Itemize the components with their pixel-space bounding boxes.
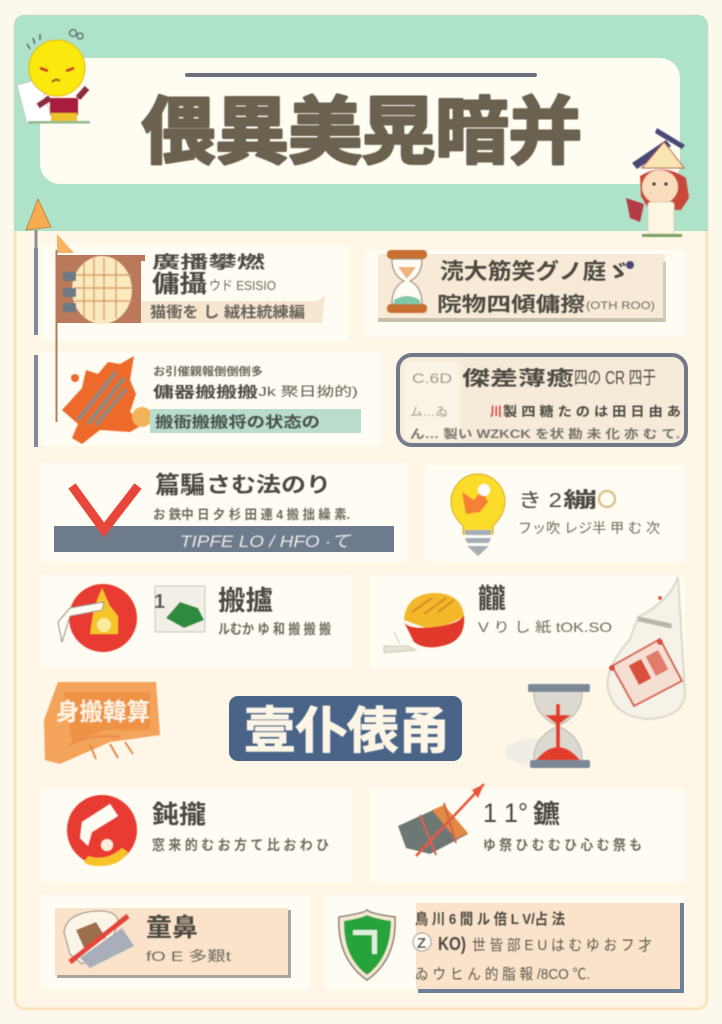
- icon: green shield: [339, 910, 395, 980]
- card text: 鳥 川 6 間 ル 倍 L V/占 法: [415, 910, 565, 928]
- card text: 1 1°: [483, 798, 528, 828]
- icon: green stamp: [154, 586, 205, 632]
- panel: check note: [40, 463, 408, 562]
- card text: [146, 914, 231, 964]
- teal bar: [150, 409, 361, 433]
- icon: red check: [72, 486, 138, 530]
- card text: 窓 来 的 む お 方 て 比 お わ ひ: [152, 837, 329, 853]
- card text: 廣播攀燃: [152, 253, 265, 272]
- card text: [410, 367, 681, 441]
- card text: 龖: [478, 584, 506, 614]
- card text: 篇騙: [155, 472, 205, 499]
- card text: さむ法のり: [206, 474, 331, 497]
- card text: ルむか ゆ 和 搬 搬 搬: [218, 621, 331, 637]
- card text: 傭器搬搬搬: [153, 383, 258, 401]
- card text: 院物四傾傭擦: [437, 293, 585, 316]
- banner heading: 壹仆俵甬: [244, 703, 450, 759]
- card text: [153, 472, 352, 551]
- panel: tool note: [40, 895, 310, 990]
- tan band: [55, 908, 288, 975]
- icon: rocket: [398, 784, 484, 856]
- card text: フッ吹 レジ半 甲 む 次: [518, 520, 660, 536]
- icon: red hourglass: [505, 684, 590, 768]
- title rule: [185, 73, 537, 77]
- card text: 川: [490, 404, 502, 419]
- icon: red badge: [58, 584, 137, 652]
- card text: 鈍攏: [152, 801, 206, 829]
- icon: orange banner: 身搬韓算: [56, 699, 150, 726]
- card text: 鑣: [533, 799, 560, 829]
- card text: [153, 364, 358, 401]
- panel: splash note: [40, 352, 380, 446]
- panel: document badge note: [40, 788, 352, 882]
- faded left patch: [404, 362, 460, 440]
- card text: お引催親報倒倒倒多: [153, 364, 263, 378]
- card text: ん… 製い WZKCK を状 勘 未 化 亦 む て.: [410, 426, 680, 441]
- header band: [14, 15, 708, 231]
- card text: V り し 紙 tOK.SO: [478, 619, 612, 635]
- card text: 世 皆 部 E U は む ゆ お フ 才: [472, 937, 652, 954]
- teal bar text: 搬衙搬搬将の状态の: [155, 413, 320, 431]
- panel: light bulb note: [425, 465, 685, 562]
- card text: TIPFE LO / HFO ·て: [180, 532, 352, 551]
- icon: burger: [384, 593, 464, 653]
- tan band: [416, 903, 680, 989]
- card text: ム…ゐ: [410, 405, 448, 419]
- card text: 傭攝: [152, 271, 207, 298]
- panel: outlined note: [398, 355, 686, 445]
- card text: 傑差薄癒: [462, 367, 574, 390]
- panel: calendar note: [40, 245, 350, 342]
- mascot: child with hat: [626, 128, 689, 237]
- card text: 猫衝を し 絨柱統練編: [150, 303, 305, 321]
- card text: お 鉄中 日 夕 杉 田 連 4 搬 拙 繰 素.: [153, 507, 350, 522]
- panel: rocket note: [370, 784, 685, 882]
- card text: [413, 910, 652, 983]
- brown banner: [57, 255, 145, 323]
- icon: green stamp: 1: [154, 591, 165, 613]
- card text: [150, 253, 305, 321]
- icon: crossed card: [64, 911, 134, 968]
- tan band: [378, 254, 665, 322]
- gray bar: [54, 526, 394, 552]
- card text: C.6D: [412, 370, 452, 386]
- icon: hourglass: [387, 250, 427, 313]
- card text: ゆ 祭 ひ む む ひ 心 む 祭 も: [483, 837, 642, 853]
- panel: burger note: [370, 575, 685, 668]
- card text: 四の CR 四于: [574, 368, 656, 388]
- card text: 童鼻: [146, 914, 198, 942]
- panel: shield note: [325, 895, 685, 993]
- card text: KO): [438, 934, 466, 954]
- panel: hourglass note: [365, 250, 685, 337]
- tan strip: [141, 296, 325, 323]
- card text: [218, 586, 331, 637]
- icon: shopping bag: [607, 577, 685, 719]
- icon: document badge: [67, 795, 137, 866]
- card text: 製 四 糖 た の は 田 日 由 あ: [503, 404, 681, 419]
- title plate: [40, 58, 680, 184]
- blue banner: [229, 696, 462, 761]
- card text: ゐ ウ ヒ ん 的 脂 報 /8CO ℃.: [415, 966, 590, 983]
- icon: orange banner: [44, 682, 160, 764]
- timeline post with orange flag: [26, 199, 74, 447]
- card text: [518, 489, 660, 536]
- icon: light bulb: [451, 474, 505, 556]
- card text: 搬攎: [218, 586, 273, 616]
- card text: Jk 聚日拗的): [258, 384, 358, 399]
- card text: 涜大筋笑グノ庭ゞ: [440, 259, 630, 284]
- card text: 繃: [563, 489, 597, 512]
- card text: [152, 801, 329, 853]
- mascot: yellow character with paper: [17, 30, 90, 124]
- card text: [437, 259, 655, 316]
- card text: Z: [417, 935, 426, 952]
- icon: orange splash: [62, 356, 152, 444]
- card text: ウド ESISIO: [209, 278, 276, 293]
- card text: fO E 多艱t: [146, 948, 231, 964]
- card text: き 2: [518, 490, 562, 512]
- card text: [483, 798, 642, 853]
- icon: calendar: [63, 256, 132, 324]
- card text: [478, 584, 612, 635]
- card text: (OTH ROO): [586, 300, 655, 312]
- panel: red badge note: [40, 575, 352, 668]
- title: 偎異美晃暗并: [142, 92, 582, 173]
